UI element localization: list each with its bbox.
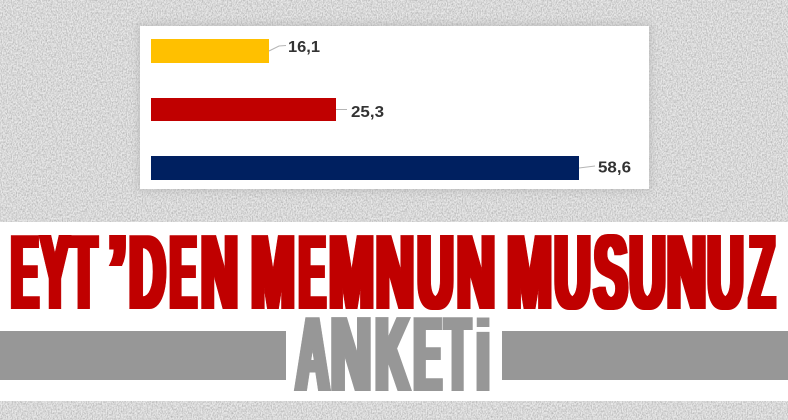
bar: 25,3	[151, 98, 384, 121]
title: Y	[41, 214, 69, 332]
title: M	[507, 214, 552, 332]
bar: 16,1	[151, 39, 320, 63]
title: M	[251, 214, 295, 332]
right grey bar	[502, 331, 788, 380]
title: U	[630, 214, 666, 332]
title: U	[708, 214, 744, 332]
title: U	[418, 214, 454, 332]
title: T	[71, 214, 96, 332]
title: N	[667, 214, 706, 332]
title: S	[594, 214, 627, 332]
bar: 58,6: 58,6	[598, 160, 631, 176]
left grey bar	[0, 331, 286, 380]
bar: 16,1: 16,1	[288, 39, 320, 56]
subtitle: T	[445, 296, 470, 414]
title: N	[201, 214, 238, 332]
bar: 25,3: 25,3	[351, 104, 384, 121]
title: E	[299, 214, 325, 332]
title: N	[376, 214, 414, 332]
title: U	[554, 214, 590, 332]
title	[11, 214, 774, 332]
panel: bar chart	[138, 24, 651, 191]
title: ’	[108, 214, 128, 332]
title: M	[329, 214, 374, 332]
white banner	[0, 222, 788, 401]
title: E	[11, 214, 38, 332]
subtitle: N	[331, 296, 371, 414]
title: D	[129, 214, 165, 332]
subtitle: İ	[477, 314, 489, 408]
bar: 58,6	[151, 156, 631, 180]
subtitle: K	[376, 296, 409, 414]
title: E	[170, 214, 196, 332]
subtitle: E	[414, 296, 441, 414]
subtitle: A	[296, 296, 329, 414]
subtitle	[296, 296, 489, 414]
title: N	[457, 214, 495, 332]
